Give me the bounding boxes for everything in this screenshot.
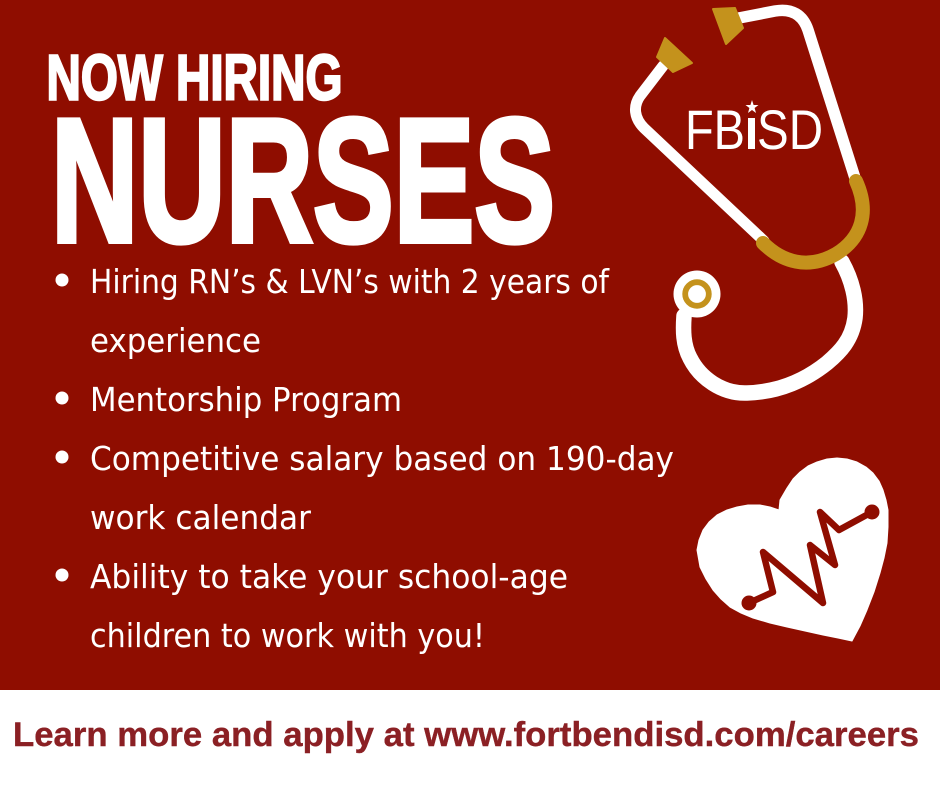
bullet: salary xyxy=(56,440,674,537)
right ear tube xyxy=(739,10,855,178)
heading: nurses: NURSES xyxy=(51,83,555,279)
left ear tip xyxy=(657,38,692,72)
icon: heart with pulse xyxy=(697,458,888,641)
left ear tube xyxy=(635,66,764,241)
bullet: mentorship: Mentorship Program xyxy=(90,381,402,419)
footer call to action: Learn more and apply at www.fortbendisd.com/careers xyxy=(13,716,919,754)
bullet list xyxy=(56,263,674,655)
heart shape xyxy=(697,458,888,641)
lower tube xyxy=(684,262,855,393)
bullet: salary: Competitive salary based on 190-day xyxy=(90,440,674,478)
heading: now hiring: NOW HIRING xyxy=(46,42,342,114)
bullet: hiring: experience xyxy=(90,322,261,360)
logo: FBISD: SD xyxy=(757,98,823,161)
bullet: salary: work calendar xyxy=(90,499,312,537)
icon: stethoscope xyxy=(635,8,863,393)
bullet: hiring: Hiring RN’s & LVN’s with 2 years of xyxy=(90,263,610,301)
pulse line xyxy=(749,512,872,603)
bullet: children xyxy=(56,558,568,655)
bullet: children: children to work with you! xyxy=(90,617,485,655)
gold tube xyxy=(763,181,863,263)
pulse end dot xyxy=(864,504,880,520)
pulse start dot xyxy=(742,596,756,610)
chest piece xyxy=(674,270,720,318)
gold ring xyxy=(685,282,709,306)
right ear tip xyxy=(713,8,743,44)
logo: FBISD xyxy=(685,98,823,161)
bullet: children: Ability to take your school-age xyxy=(90,558,568,596)
bullet: hiring xyxy=(56,263,610,360)
logo: FBISD: FB xyxy=(685,98,745,161)
